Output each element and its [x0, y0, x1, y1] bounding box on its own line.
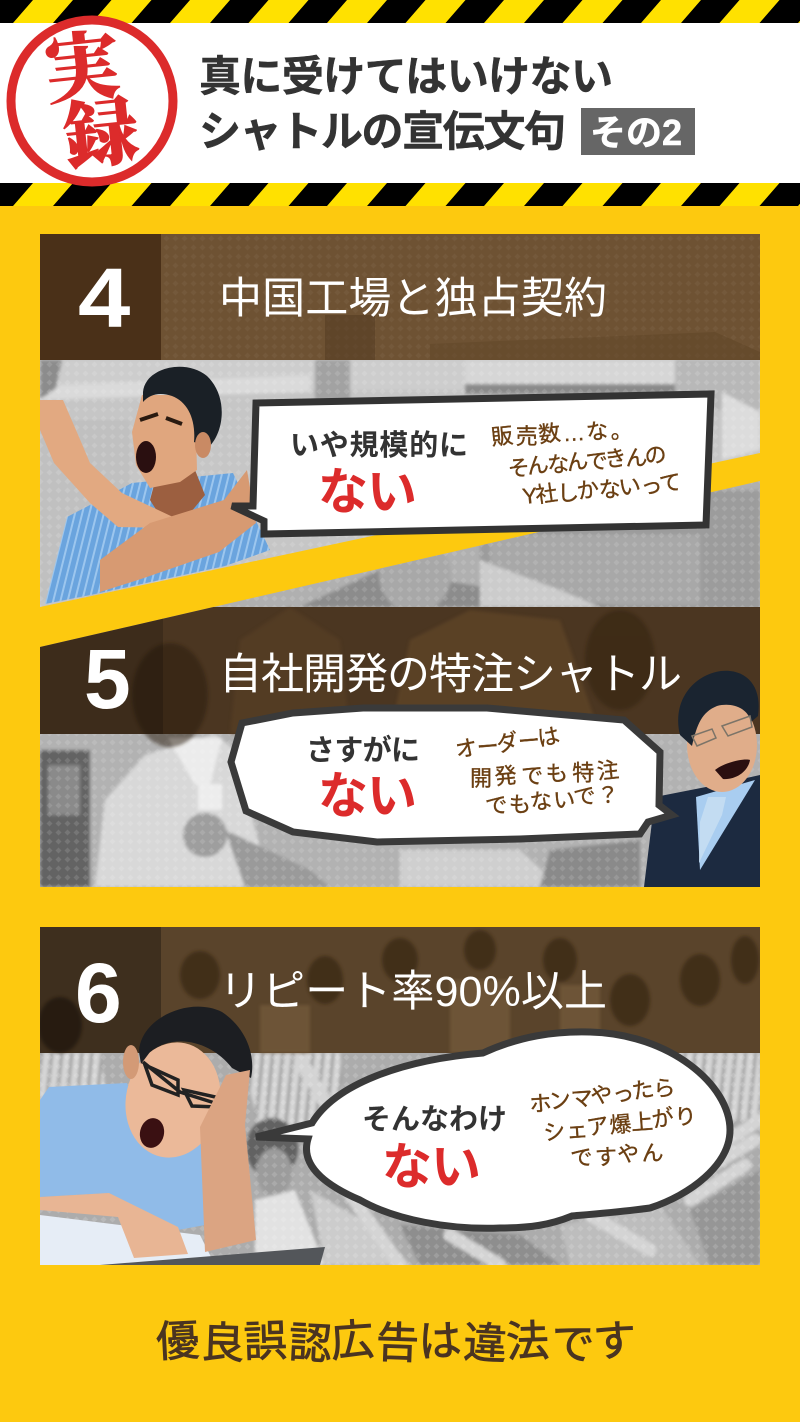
bubble	[231, 708, 672, 842]
header bar	[40, 607, 760, 734]
shirt	[45, 473, 270, 604]
handwritten note: 開発でも特注	[469, 757, 620, 792]
ear	[195, 432, 211, 458]
head	[115, 1033, 231, 1167]
title: 真に受けてはいけない	[199, 53, 613, 100]
ear	[123, 1045, 139, 1079]
number box	[40, 234, 161, 360]
shirt	[40, 1083, 208, 1230]
right arm	[100, 470, 256, 592]
badge: その2: その2	[590, 112, 682, 153]
handwritten note: シェア爆上がり	[541, 1101, 699, 1147]
left arm	[40, 400, 173, 528]
header bar	[40, 927, 760, 1053]
bubble	[256, 1032, 730, 1228]
callout: panel 4	[232, 394, 711, 534]
heading: 中国工場と独占契約	[219, 275, 607, 323]
handwritten note: 販売数…な。	[490, 416, 633, 451]
face	[687, 698, 757, 792]
stamp: 実録: 実	[39, 6, 124, 120]
handwritten note: そんなんできんの	[506, 441, 668, 482]
title: シャトルの宣伝文句	[199, 108, 566, 155]
left hand	[40, 1193, 188, 1258]
callout: panel 5	[231, 708, 672, 842]
man: exasperated at laptop	[40, 1007, 325, 1265]
title	[199, 53, 613, 155]
laptop	[100, 1247, 325, 1265]
mouth	[137, 1116, 167, 1150]
number 5: 5	[84, 632, 131, 726]
handwritten note: ですやん	[569, 1138, 665, 1173]
glasses	[692, 716, 752, 746]
hazard stripe top	[0, 0, 800, 23]
number 4: 4	[78, 251, 131, 345]
hair	[139, 1007, 252, 1078]
hair	[143, 367, 222, 448]
tie	[699, 797, 726, 863]
panel: 4	[40, 234, 760, 610]
handwritten note: オーダーは	[453, 722, 562, 764]
no: ない	[318, 768, 417, 824]
number box	[40, 927, 161, 1053]
hazard stripe bottom	[0, 183, 800, 206]
mouth	[136, 441, 156, 473]
right arm	[200, 1070, 256, 1252]
no: ない	[318, 464, 417, 520]
handwritten note	[527, 1073, 699, 1173]
callout: panel 6	[256, 1032, 730, 1228]
head	[132, 395, 197, 488]
handwritten note: ホンマやったら	[527, 1073, 677, 1118]
glasses	[143, 1062, 220, 1107]
handwritten note	[490, 416, 683, 510]
lead text: そんなわけ	[362, 1104, 507, 1136]
header crowd ghost	[38, 930, 759, 1053]
header bar	[40, 234, 760, 360]
heading: 自社開発の特注シャトル	[219, 651, 682, 699]
header photo ghost	[132, 607, 655, 747]
heading: リピート率90%以上	[219, 968, 607, 1016]
shirt	[696, 780, 755, 870]
lead text: いや規模的に	[290, 429, 468, 462]
crowd photo	[40, 1052, 760, 1265]
header photo ghost	[325, 315, 760, 360]
suit	[644, 775, 760, 887]
no: ない	[382, 1139, 481, 1195]
bubble	[232, 394, 711, 534]
desk	[40, 1215, 215, 1265]
header band	[0, 0, 800, 206]
handwritten note	[453, 722, 621, 821]
stamp: 実録	[11, 6, 173, 186]
number 6: 6	[75, 946, 122, 1040]
number box	[40, 607, 163, 734]
handwritten note: でもないで？	[484, 780, 621, 821]
man: crossed arms	[40, 367, 270, 604]
eyes	[140, 414, 182, 424]
factory photo	[40, 360, 760, 610]
mouth	[715, 759, 750, 779]
man: suit crying	[644, 671, 760, 887]
footer message: 優良誤認広告は違法です	[155, 1316, 637, 1370]
hair	[678, 671, 759, 746]
panel: 6	[38, 927, 760, 1265]
lab photo	[40, 480, 760, 890]
panel: 5	[40, 480, 760, 890]
lead text: さすがに	[306, 733, 420, 767]
stamp: 実録: 録	[58, 73, 143, 186]
neck	[150, 470, 205, 535]
handwritten note: Y社しかないって	[521, 469, 683, 510]
